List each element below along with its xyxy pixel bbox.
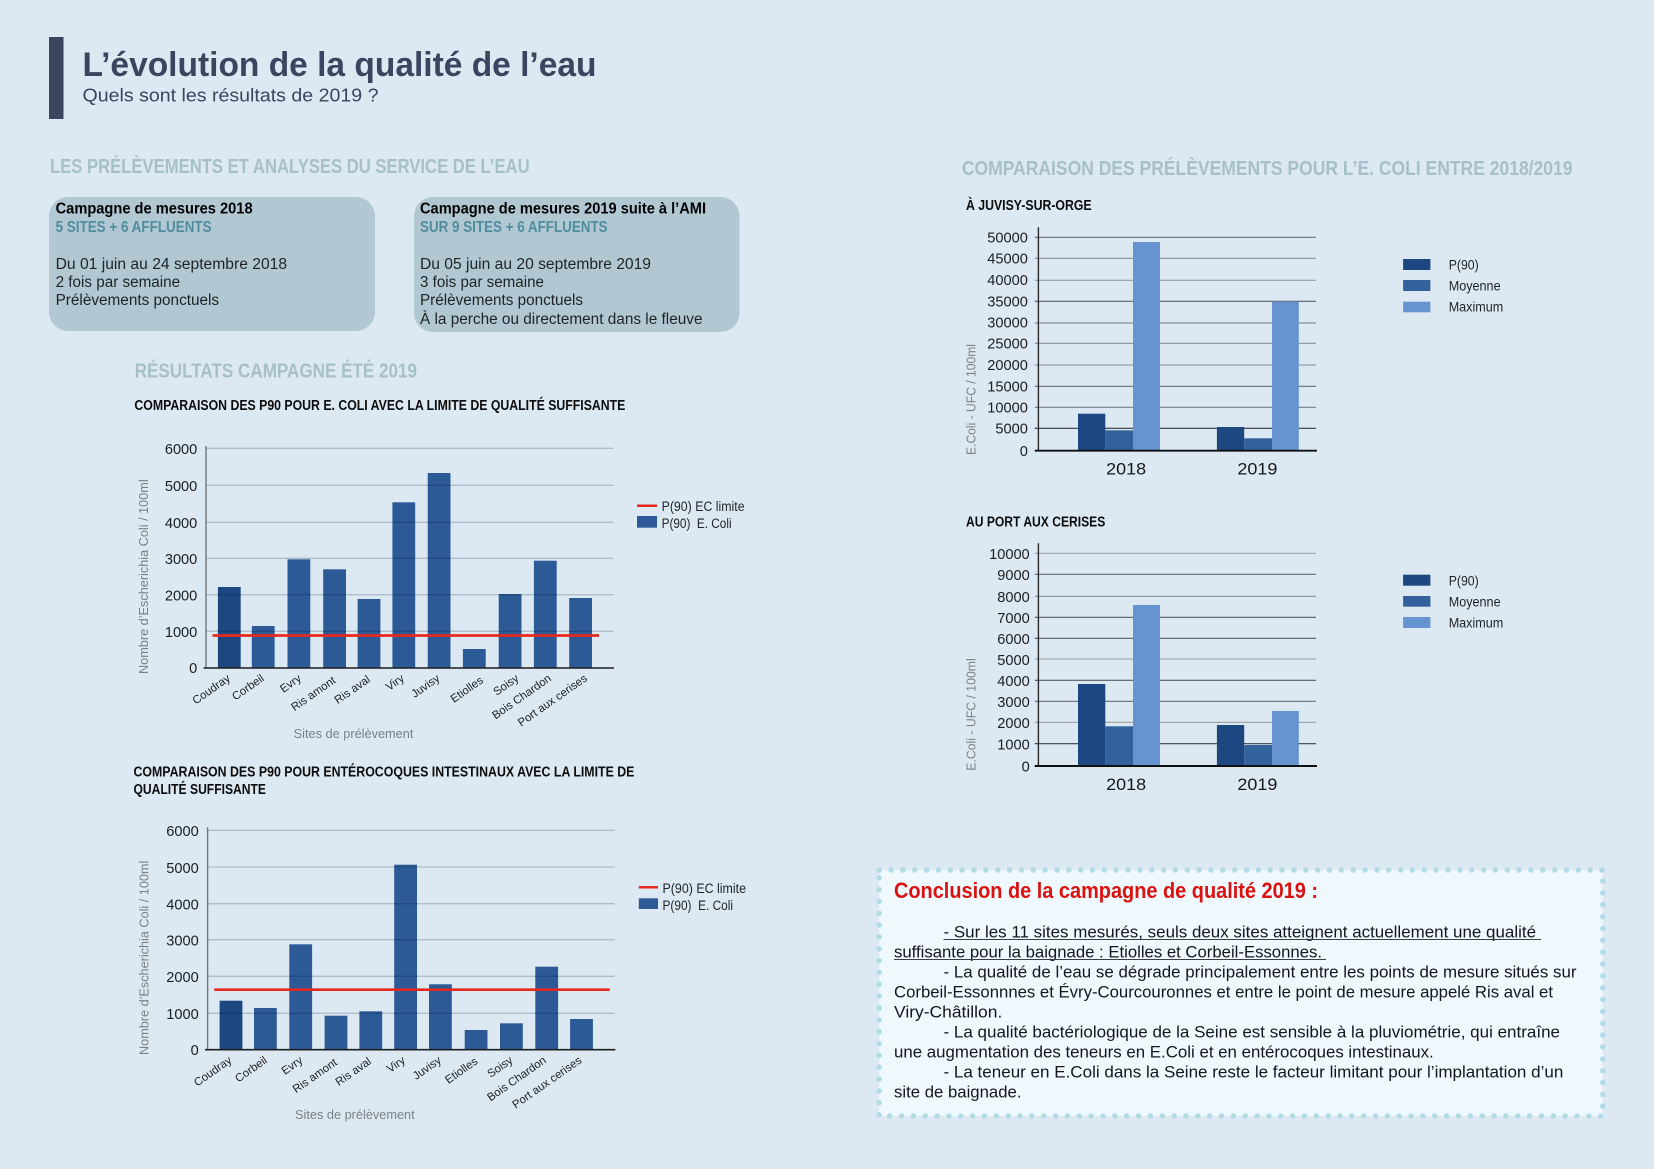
panel: campagne 2019: Du 05 juin au 20 septembre 2019: [420, 256, 651, 273]
year labels: 2018: [1106, 459, 1146, 478]
legend: Maximum: [1449, 615, 1503, 630]
site labels: Viry: [385, 1054, 408, 1076]
y axis labels: [166, 824, 199, 1059]
legend: [1403, 257, 1503, 314]
conclusion text: - Sur les 11 sites mesurés, seuls deux sites atteignent actuellement une qualité: [944, 923, 1536, 942]
y axis labels: 0: [1022, 760, 1030, 776]
panel: campagne 2019: Prélèvements ponctuels: [420, 292, 583, 309]
y axis labels: 2000: [166, 970, 199, 986]
panel: campagne 2018: Campagne de mesures 2018: [56, 201, 253, 218]
legend: P(90): [1449, 257, 1479, 272]
y axis labels: [989, 547, 1030, 776]
accent bar: [49, 37, 64, 119]
y axis labels: 0: [1020, 444, 1028, 460]
conclusion text: [894, 923, 1577, 1102]
site labels: Etiolles: [449, 674, 486, 706]
x axis title: Sites de prélèvement: [295, 1108, 415, 1122]
chart heading: E. coli: COMPARAISON DES P90 POUR E. COLI AVEC LA LIMITE DE QUALITÉ SUFFISANTE: [134, 397, 626, 414]
panel: conclusion: [879, 870, 1603, 1116]
legend: Moyenne: [1449, 278, 1501, 293]
bar chart: Port aux Cerises: [964, 543, 1503, 794]
y axis labels: 0: [191, 1043, 199, 1059]
y axis labels: 45000: [987, 252, 1028, 268]
site labels: Bois Chardon: [485, 1055, 549, 1104]
y axis labels: 5000: [165, 479, 197, 495]
conclusion text: suffisante pour la baignade : Etiolles et Corbeil-Essonnes.: [894, 943, 1322, 962]
y axis labels: 35000: [987, 294, 1028, 310]
y axis labels: 5000: [995, 422, 1028, 438]
x axis title: Sites de prélèvement: [294, 727, 414, 741]
panel: campagne 2018: Prélèvements ponctuels: [56, 292, 219, 309]
y axis title: E.Coli - UFC / 100ml: [964, 344, 978, 455]
site labels: Viry: [384, 672, 407, 694]
bars: [218, 473, 592, 668]
year labels: 2018: [1106, 775, 1146, 794]
site labels: Port aux cerises: [510, 1054, 584, 1111]
bars 2019: [1217, 711, 1299, 766]
site labels: Corbeil: [230, 673, 267, 703]
y axis labels: 7000: [997, 611, 1030, 627]
y axis labels: 20000: [987, 358, 1028, 374]
limit line: [214, 988, 610, 991]
panel: campagne 2018: Du 01 juin au 24 septembre 2018: [56, 256, 287, 273]
y axis labels: 6000: [166, 824, 199, 840]
bar chart: P90 entérocoques: [138, 824, 746, 1122]
y axis labels: [987, 230, 1028, 460]
heading: prélèvements et analyses: LES PRÉLÈVEMENTS ET ANALYSES DU SERVICE DE L’EAU: [50, 155, 530, 178]
conclusion text: Corbeil-Essonnnes et Évry-Courcouronnes et entre le point de mesure appelé Ris aval et: [894, 983, 1553, 1002]
chart heading: entérocoques: COMPARAISON DES P90 POUR ENTÉROCOQUES INTESTINAUX AVEC LA LIMITE DE: [134, 764, 635, 781]
y axis labels: 3000: [166, 934, 199, 950]
y axis labels: 3000: [165, 552, 197, 568]
site labels: Evry: [280, 1054, 305, 1078]
panel: campagne 2018: 5 SITES + 6 AFFLUENTS: [56, 219, 212, 236]
y axis labels: 40000: [987, 273, 1028, 289]
panel: campagne 2019: Campagne de mesures 2019 suite à l’AMI: [420, 201, 706, 218]
y axis labels: 2000: [165, 588, 197, 604]
title block: [49, 37, 596, 119]
y axis labels: 2000: [997, 716, 1030, 732]
bars 2019: [1217, 302, 1299, 451]
title: L’évolution de la qualité de l’eau: [82, 46, 596, 84]
legend: P(90): [1449, 573, 1479, 588]
y axis labels: 3000: [997, 695, 1030, 711]
legend: P(90) EC limite: [662, 881, 746, 896]
site labels: Ris aval: [333, 674, 373, 707]
subtitle: Quels sont les résultats de 2019 ?: [82, 85, 378, 106]
panel: campagne 2019: 3 fois par semaine: [420, 274, 544, 291]
year labels: [1106, 459, 1277, 478]
panel: campagne 2018: 2 fois par semaine: [56, 274, 180, 291]
legend: [1403, 573, 1503, 630]
site labels: Etiolles: [443, 1055, 480, 1087]
bars 2018: [1078, 242, 1160, 451]
legend: [637, 499, 745, 531]
chart heading: entérocoques: QUALITÉ SUFFISANTE: [134, 781, 266, 798]
chart heading: Port aux Cerises: AU PORT AUX CERISES: [966, 515, 1106, 531]
limit line: [212, 634, 599, 637]
bar chart: P90 E. coli: [137, 442, 745, 741]
conclusion title: Conclusion de la campagne de qualité 2019 :: [894, 878, 1318, 903]
site labels: Ris aval: [334, 1056, 374, 1089]
y axis title: Nombre d’Escherichia Coli / 100ml: [137, 479, 151, 674]
panel: campagne 2018: [49, 197, 375, 331]
y axis labels: 8000: [997, 590, 1030, 606]
chart heading: Juvisy: À JUVISY-SUR-ORGE: [966, 197, 1092, 214]
conclusion text: - La qualité de l’eau se dégrade principalement entre les points de mesure situés sur: [944, 963, 1577, 982]
bars 2018: [1078, 605, 1160, 766]
panel: campagne 2019: SUR 9 SITES + 6 AFFLUENTS: [420, 219, 608, 236]
y axis labels: 1000: [997, 738, 1030, 754]
site labels: Coudray: [191, 672, 233, 707]
year labels: 2019: [1237, 459, 1277, 478]
y axis labels: 30000: [987, 316, 1028, 332]
site labels: Corbeil: [233, 1055, 270, 1085]
site labels: Bois Chardon: [490, 673, 554, 722]
y axis labels: 4000: [165, 516, 197, 532]
y axis title: Nombre d’Escherichia Coli / 100ml: [138, 861, 152, 1055]
y axis labels: [165, 442, 197, 677]
conclusion text: - La qualité bactériologique de la Seine est sensible à la pluviométrie, qui entraîne: [944, 1023, 1560, 1042]
y axis labels: 5000: [166, 861, 199, 877]
conclusion text: une augmentation des teneurs en E.Coli et en entérocoques intestinaux.: [894, 1043, 1434, 1062]
site labels: Evry: [278, 672, 304, 696]
y axis labels: 25000: [987, 336, 1028, 352]
legend: P(90) E. Coli: [662, 516, 732, 531]
legend: Moyenne: [1449, 594, 1501, 609]
site labels: Ris amont: [289, 674, 339, 714]
conclusion text: site de baignade.: [894, 1083, 1022, 1102]
site labels: [191, 672, 590, 729]
y axis labels: 10000: [987, 400, 1028, 416]
y axis labels: 6000: [165, 442, 197, 458]
legend: [639, 881, 746, 913]
panel: campagne 2019: À la perche ou directement dans le fleuve: [420, 311, 702, 328]
bar chart: Juvisy-sur-Orge: [964, 227, 1503, 478]
site labels: Soisy: [492, 672, 521, 698]
y axis labels: 6000: [997, 632, 1030, 648]
y axis labels: 10000: [989, 547, 1030, 563]
chart heading: entérocoques: [134, 764, 635, 798]
y axis labels: 0: [189, 661, 197, 677]
y axis labels: 4000: [997, 674, 1030, 690]
site labels: [192, 1054, 584, 1111]
y axis labels: 5000: [997, 653, 1030, 669]
site labels: Coudray: [192, 1054, 234, 1089]
y axis labels: 4000: [166, 898, 199, 914]
y axis labels: 9000: [997, 568, 1030, 584]
year labels: 2019: [1237, 775, 1277, 794]
site labels: Ris amont: [291, 1056, 340, 1096]
y axis labels: 15000: [987, 380, 1028, 396]
y axis labels: 1000: [165, 625, 197, 641]
y axis labels: 50000: [987, 230, 1028, 246]
conclusion text: - La teneur en E.Coli dans la Seine reste le facteur limitant pour l’implantation d’un: [944, 1063, 1563, 1082]
site labels: Port aux cerises: [516, 672, 590, 729]
year labels: [1106, 775, 1277, 794]
bars: [220, 865, 593, 1050]
y axis title: E.Coli - UFC / 100ml: [964, 658, 978, 771]
site labels: Juvisy: [409, 672, 442, 701]
heading: résultats campagne: RÉSULTATS CAMPAGNE ÉTÉ 2019: [135, 360, 417, 383]
y axis labels: 1000: [166, 1007, 199, 1023]
legend: Maximum: [1449, 299, 1503, 314]
conclusion text: Viry-Châtillon.: [894, 1003, 1002, 1022]
site labels: Juvisy: [411, 1054, 444, 1083]
legend: P(90) E. Coli: [662, 898, 733, 913]
panel: campagne 2019: [414, 197, 740, 332]
site labels: Soisy: [486, 1054, 515, 1080]
legend: P(90) EC limite: [662, 499, 745, 514]
